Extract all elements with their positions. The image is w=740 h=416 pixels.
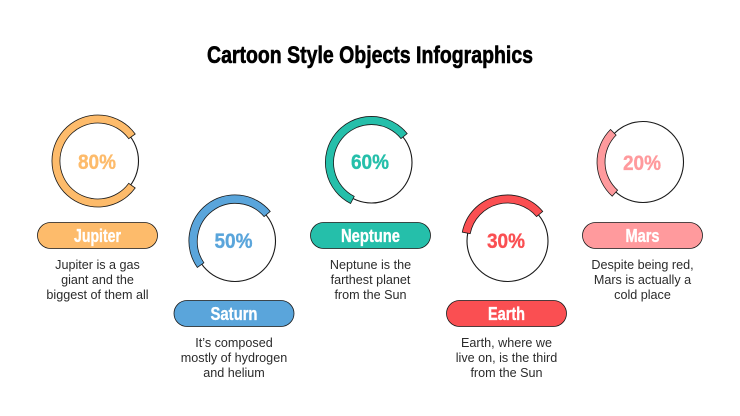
label pill: Mars bbox=[582, 222, 702, 248]
donut: Mars 20% bbox=[597, 122, 684, 202]
donut: Earth 30%: 30% bbox=[487, 230, 525, 253]
label pill: Neptune bbox=[310, 222, 430, 248]
donut: Mars 20%: 20% bbox=[623, 152, 661, 175]
donut: Jupiter 80%: 80% bbox=[78, 151, 116, 174]
donut: Jupiter 80% bbox=[52, 115, 138, 207]
description: Jupiter: Jupiter is a gas bbox=[55, 258, 140, 272]
donut: Earth 30% bbox=[462, 195, 548, 282]
panel: Jupiter bbox=[38, 115, 158, 302]
label pill: Earth: Earth bbox=[488, 304, 525, 324]
description: Saturn: It’s composed bbox=[195, 336, 273, 350]
description: Mars: Despite being red, bbox=[591, 258, 694, 272]
description: Saturn: mostly of hydrogen bbox=[181, 351, 287, 365]
panel: Saturn bbox=[174, 195, 294, 380]
description: Earth: live on, is the third bbox=[456, 351, 557, 365]
label pill: Jupiter: Jupiter bbox=[74, 226, 121, 246]
description: Mars: cold place bbox=[614, 288, 671, 302]
description: Earth: Earth, where we bbox=[461, 336, 552, 350]
label pill: Neptune: Neptune bbox=[341, 226, 400, 246]
panel: Neptune bbox=[310, 116, 430, 302]
label pill: Jupiter bbox=[38, 222, 158, 248]
description: Earth: from the Sun bbox=[470, 366, 543, 380]
description: Jupiter: giant and the bbox=[61, 273, 134, 287]
description: Neptune: from the Sun bbox=[334, 288, 407, 302]
donut: Neptune 60% bbox=[325, 116, 412, 204]
label pill: Saturn bbox=[174, 300, 294, 326]
description: Neptune: Neptune is the bbox=[330, 258, 411, 272]
donut: Saturn 50%: 50% bbox=[214, 230, 253, 253]
description: Saturn: and helium bbox=[203, 366, 265, 380]
donut: Saturn 50% bbox=[189, 195, 276, 282]
description: Jupiter: biggest of them all bbox=[46, 288, 149, 302]
donut: Neptune 60%: 60% bbox=[351, 151, 389, 174]
label pill: Mars: Mars bbox=[626, 226, 660, 246]
label pill: Saturn: Saturn bbox=[210, 304, 258, 324]
label pill: Earth bbox=[446, 300, 566, 326]
title: Cartoon Style Objects Infographics bbox=[207, 42, 533, 69]
description: Neptune: farthest planet bbox=[331, 273, 411, 287]
description: Mars: Mars is actually a bbox=[594, 273, 691, 287]
panel: Mars bbox=[582, 122, 702, 302]
panel: Earth bbox=[446, 195, 566, 380]
